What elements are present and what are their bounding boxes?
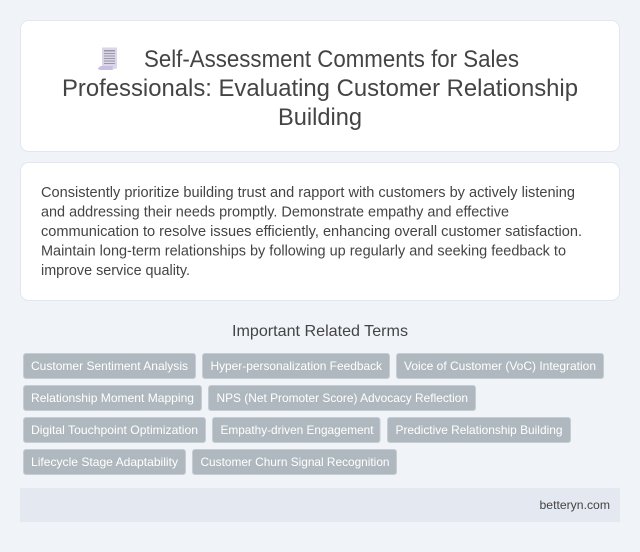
- tag: [24, 450, 186, 474]
- tag: Lifecycle Stage Adaptability: [31, 455, 178, 469]
- tag: [24, 354, 196, 378]
- heading: related terms: Important Related Terms: [232, 323, 408, 340]
- panel: title card: [20, 20, 620, 152]
- text block: summary: improve service quality.: [41, 263, 190, 279]
- tag: [212, 418, 380, 442]
- text block: summary: [41, 185, 582, 279]
- tag: [208, 386, 476, 410]
- icon: document scroll: [98, 48, 117, 70]
- tag: Digital Touchpoint Optimization: [31, 423, 198, 437]
- tag: Empathy-driven Engagement: [220, 423, 374, 437]
- text block: summary: Consistently prioritize building trust and rapport with customers by actively listening: [41, 185, 575, 201]
- tag: NPS (Net Promoter Score) Advocacy Reflection: [216, 391, 468, 405]
- panel: summary card: [20, 162, 620, 300]
- tag: [24, 418, 206, 442]
- footer bar: [20, 488, 620, 522]
- title: Self-Assessment Comments for Sales: [144, 46, 519, 73]
- text block: summary: communication to resolve issues efficiently, enhancing overall customer satisfaction.: [41, 224, 582, 240]
- tag: [396, 354, 604, 378]
- tag: Voice of Customer (VoC) Integration: [404, 359, 596, 373]
- tag: Customer Sentiment Analysis: [31, 359, 188, 373]
- tag: Hyper-personalization Feedback: [210, 359, 383, 373]
- tag: [24, 386, 202, 410]
- tag: [202, 354, 390, 378]
- tag: [388, 418, 570, 442]
- tag: Customer Churn Signal Recognition: [200, 455, 390, 469]
- title: Professionals: Evaluating Customer Relationship: [62, 75, 578, 102]
- tag: [192, 450, 396, 474]
- footer source text: betteryn.com: [540, 498, 610, 512]
- tag: Predictive Relationship Building: [396, 423, 562, 437]
- text block: summary: and addressing their needs promptly. Demonstrate empathy and effective: [41, 204, 509, 220]
- title: Building: [278, 104, 362, 131]
- text block: summary: Maintain long-term relationships by following up regularly and seeking feedback to: [41, 244, 566, 260]
- tag: Relationship Moment Mapping: [31, 391, 194, 405]
- tag group: related terms: [24, 354, 604, 474]
- title: [62, 46, 578, 131]
